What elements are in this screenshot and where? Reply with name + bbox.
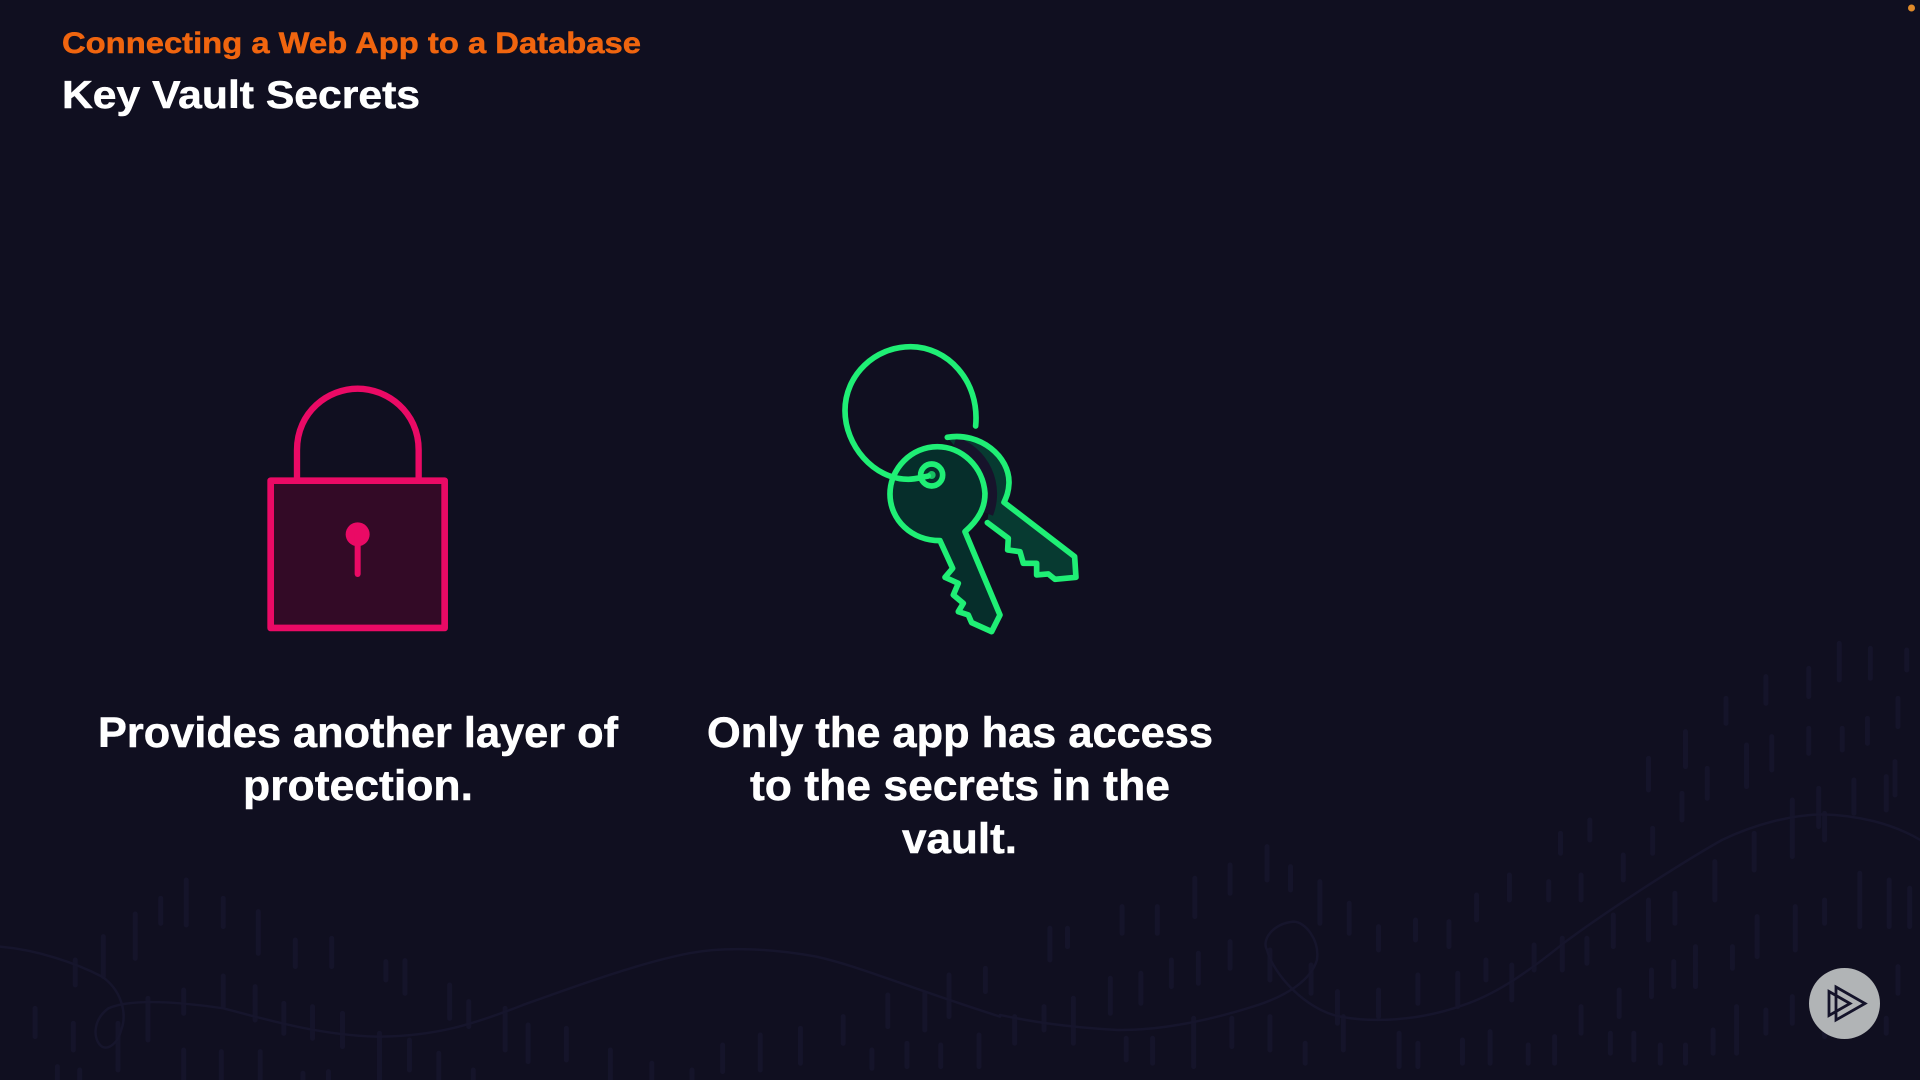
heading: slide title: Key Vault Secrets bbox=[62, 74, 420, 117]
text: access caption bbox=[707, 709, 1213, 863]
text: protection caption bbox=[98, 709, 619, 810]
text: protection caption: Provides another layer of bbox=[98, 709, 619, 757]
recording indicator dot bbox=[1908, 4, 1915, 12]
text: access caption: to the secrets in the bbox=[750, 762, 1170, 810]
icon: play logo button bbox=[1809, 968, 1880, 1039]
icon: keys on a ring bbox=[845, 347, 1076, 632]
heading: course title: Connecting a Web App to a Database bbox=[62, 27, 641, 60]
icon: padlock bbox=[271, 389, 445, 628]
text: access caption: Only the app has access bbox=[707, 709, 1213, 757]
text: protection caption: protection. bbox=[243, 762, 473, 810]
text: access caption: vault. bbox=[902, 815, 1017, 863]
